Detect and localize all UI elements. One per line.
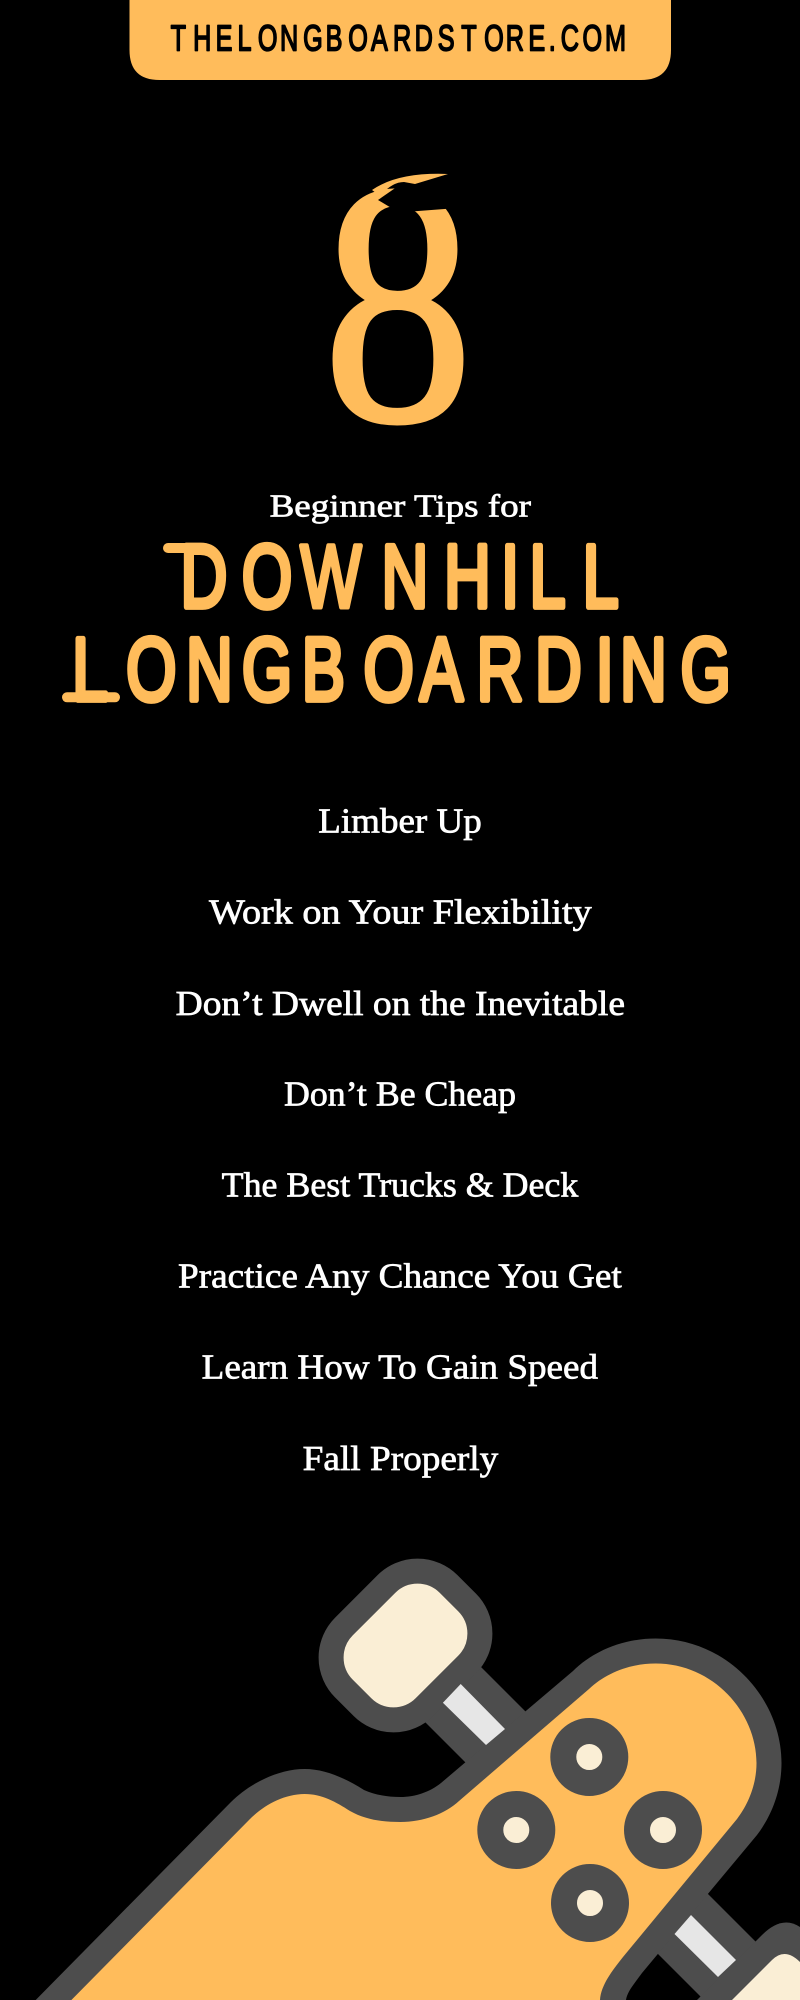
tip 7: Learn How To Gain Speed <box>202 1347 599 1386</box>
header tab with site name <box>130 0 671 80</box>
tip 2: Work on Your Flexibility <box>209 892 592 931</box>
top truck <box>313 1553 535 1777</box>
bolt holes <box>490 1731 689 1929</box>
title: downhill longboarding <box>62 525 731 719</box>
tip 8: Fall Properly <box>303 1439 499 1478</box>
large numeral 8: 8 <box>323 113 473 495</box>
list of eight tips <box>176 802 625 1478</box>
tip 4: Don’t Be Cheap <box>284 1074 516 1113</box>
longboard illustration <box>36 1553 800 2000</box>
tip 3: Don’t Dwell on the Inevitable <box>176 984 625 1023</box>
bottom truck <box>650 1886 800 2000</box>
title line 1: DOWNHILL <box>181 525 619 626</box>
site name: THELONGBOARDSTORE.COM <box>171 18 626 58</box>
title line 2: LONGBOARDING <box>72 618 731 719</box>
tip 1: Limber Up <box>318 802 482 841</box>
subtitle: Beginner Tips for <box>270 488 531 524</box>
deck <box>36 1638 781 2000</box>
tip 6: Practice Any Chance You Get <box>178 1256 622 1295</box>
tip 5: The Best Trucks & Deck <box>222 1166 579 1205</box>
axle highlights <box>443 1684 736 1977</box>
